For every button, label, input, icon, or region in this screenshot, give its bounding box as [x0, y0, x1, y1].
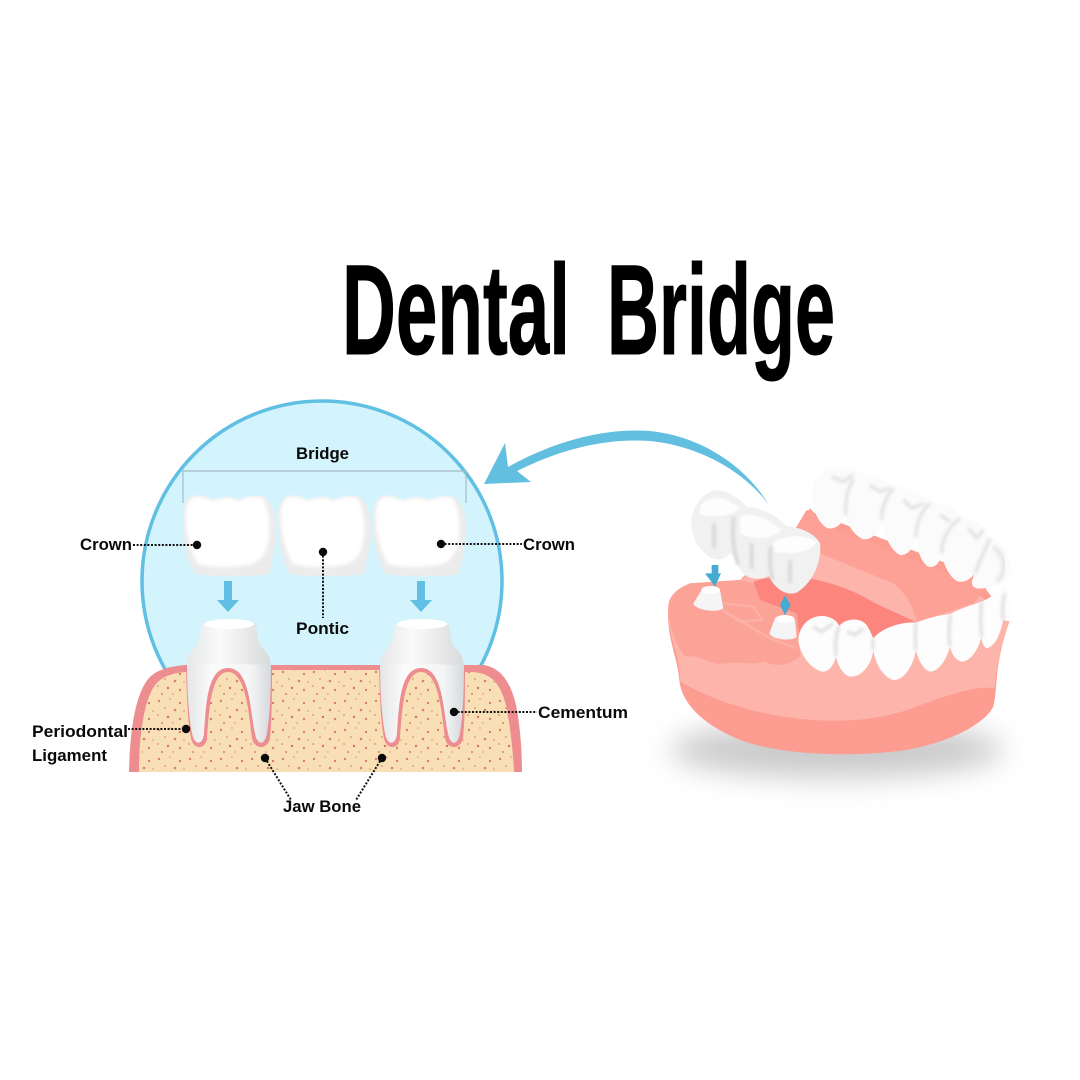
panel: denture illustration — [668, 467, 1012, 778]
arrow down right — [410, 581, 432, 612]
bridge teeth — [692, 490, 820, 594]
lower gum base — [668, 510, 1010, 754]
abutment posts — [693, 586, 797, 640]
arrow down left — [217, 581, 239, 612]
callout: Crown right — [437, 536, 575, 554]
arrow: curved from denture to circle — [484, 430, 769, 505]
small blue arrow right — [780, 595, 791, 615]
callout: Periodontal Ligament — [32, 723, 190, 765]
small blue arrow left — [705, 565, 721, 587]
palate back wall — [797, 508, 987, 623]
callout: Pontic — [296, 548, 349, 638]
callout: Periodontal Ligament: Periodontal — [32, 723, 128, 741]
back tooth row — [812, 467, 1012, 589]
abutment tooth right — [379, 619, 465, 747]
pontic tooth — [278, 495, 371, 576]
crown tooth right — [373, 495, 466, 576]
gum and jaw bone — [129, 665, 522, 772]
abutment tooth left — [186, 619, 272, 747]
callout: Cementum: Cementum — [538, 704, 628, 722]
bracket above bridge — [183, 471, 466, 503]
lighter gum band — [668, 540, 1010, 721]
callout: Crown left — [80, 536, 201, 554]
crown tooth left — [183, 495, 276, 576]
title: Dental — [342, 239, 570, 382]
blue magnifier circle — [140, 399, 504, 670]
front tooth row — [798, 585, 1011, 680]
label: Bridge: Bridge — [296, 445, 349, 463]
callout: Crown right: Crown — [523, 536, 575, 554]
panel: bridge cross-section diagram — [32, 401, 628, 816]
callout: Pontic: Pontic — [296, 620, 349, 638]
ground shadow — [670, 722, 1003, 778]
callout: Jaw Bone: Jaw Bone — [283, 798, 361, 816]
callout: Crown left: Crown — [80, 536, 132, 554]
palate floor — [753, 577, 917, 638]
prepared gum pad outline — [723, 603, 797, 648]
callout: Jaw Bone — [261, 754, 386, 816]
gum top surface — [668, 580, 800, 665]
callout: Cementum — [450, 704, 628, 722]
title: Bridge — [607, 239, 835, 382]
callout: Periodontal Ligament: Ligament — [32, 747, 108, 765]
